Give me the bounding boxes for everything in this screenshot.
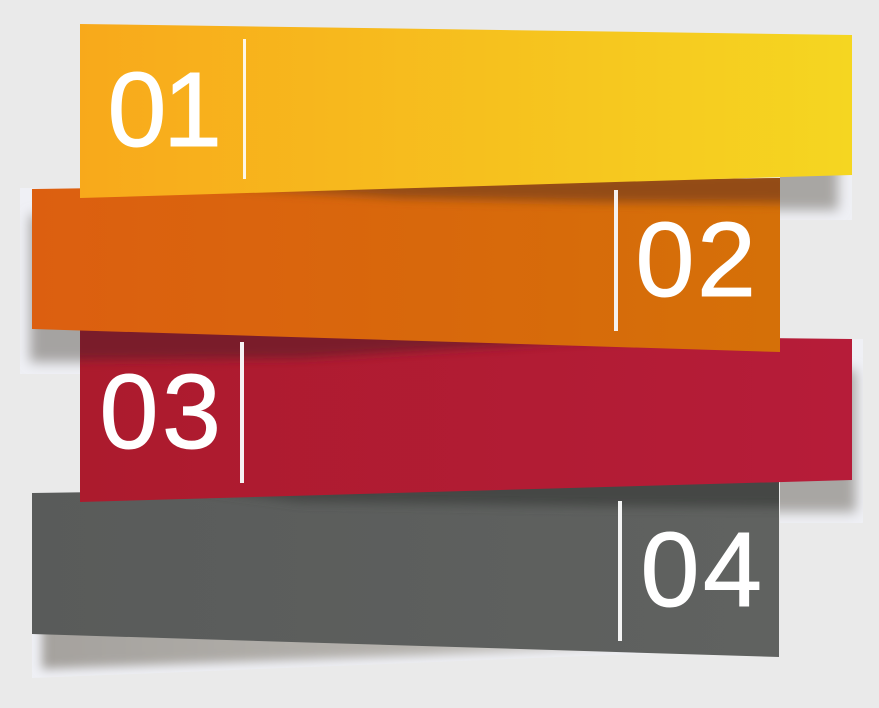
divider 4 xyxy=(618,501,622,641)
band 1: yellow xyxy=(80,24,852,198)
number 04: 04 xyxy=(640,511,762,629)
inner shadow on band 2 xyxy=(248,178,780,208)
number 03: 03 xyxy=(100,353,221,471)
shadow: band 1 xyxy=(780,175,852,220)
band 2: orange xyxy=(32,170,790,352)
band 3: crimson xyxy=(70,320,852,502)
shadow: band 3 xyxy=(780,339,863,523)
divider 1 xyxy=(243,39,246,179)
band 4: grey xyxy=(32,470,790,657)
inner shadow on band 3 xyxy=(80,330,581,364)
number 02: 02 xyxy=(636,201,756,319)
shadow: band 2 xyxy=(20,188,80,374)
shadow: band 4 xyxy=(32,634,577,678)
divider 3 xyxy=(240,342,244,483)
divider 2 xyxy=(614,190,618,331)
inner shadow on band 4 xyxy=(251,482,779,510)
number 01: 01 xyxy=(108,51,222,169)
